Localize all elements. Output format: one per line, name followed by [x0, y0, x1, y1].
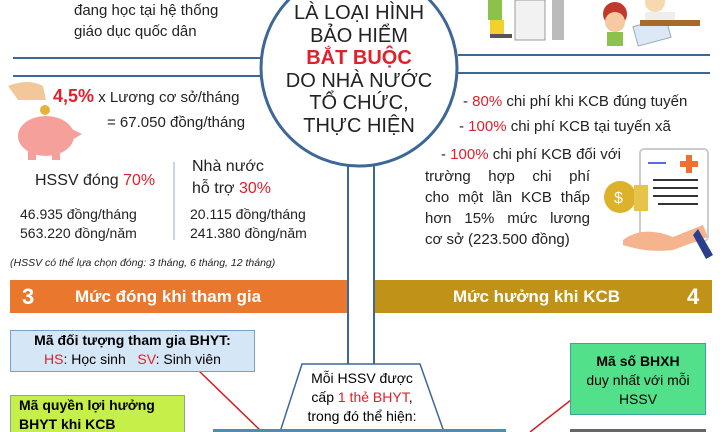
box: social insurance number: HSSV — [619, 391, 657, 407]
justified benefit text: trường hợp chi phí — [425, 168, 590, 185]
top-left text — [74, 2, 218, 40]
box: benefit code — [10, 395, 185, 432]
heading 3: 3 — [22, 284, 34, 309]
justified benefit text — [425, 168, 590, 248]
circle text: BẮT BUỘC — [306, 47, 412, 69]
justified benefit text: cơ sở (223.500 đồng) — [425, 231, 570, 248]
box: participant code: Mã đối tượng tham gia BHYT: — [34, 332, 231, 348]
text: = 67.050 đồng/tháng — [107, 114, 245, 131]
state share: hỗ trợ 30% — [192, 180, 271, 197]
box: benefit code: BHYT khi KCB — [19, 416, 115, 432]
icon: piggy bank — [8, 82, 82, 160]
icon: form with coins and hand: $ — [614, 190, 623, 207]
icon: form with coins and hand — [604, 148, 713, 259]
box: social insurance number: Mã số BHXH — [596, 353, 680, 369]
box: benefit code: Mã quyền lợi hưởng — [19, 397, 155, 413]
text: 563.220 đồng/năm — [20, 225, 137, 241]
text: - 100% chi phí KCB đối với — [441, 146, 621, 163]
heading 3: Mức đóng khi tham gia — [75, 287, 261, 306]
top-left text: đang học tại hệ thống — [74, 2, 218, 19]
box: participant code — [10, 330, 255, 372]
text: 241.380 đồng/năm — [190, 225, 307, 241]
top-left text: giáo dục quốc dân — [74, 23, 197, 40]
text: 46.935 đồng/tháng — [20, 206, 137, 222]
heading 4: 4 — [687, 284, 699, 309]
heading 3 — [10, 280, 347, 313]
formula text: 4,5% x Lương cơ sở/tháng — [53, 86, 239, 106]
text: - 100% chi phí KCB tại tuyến xã — [459, 118, 671, 135]
benefits list: - 80% chi phí khi KCB đúng tuyến — [463, 93, 687, 110]
circle text — [286, 1, 432, 136]
note: (HSSV có thể lựa chọn đóng: 3 tháng, 6 tháng, 12 tháng) — [10, 257, 275, 269]
trapezoid card callout: cấp 1 thẻ BHYT, — [311, 389, 413, 405]
circle text: BẢO HIỂM — [310, 24, 408, 46]
trapezoid card callout: Mỗi HSSV được — [311, 370, 413, 386]
circle text: THỰC HIỆN — [303, 114, 415, 136]
heading 4: Mức hưởng khi KCB — [453, 287, 620, 306]
bottom card bar — [213, 429, 506, 432]
circle text: DO NHÀ NƯỚC — [286, 70, 432, 92]
state share — [192, 158, 271, 197]
box: participant code: HS: Học sinh SV: Sinh viên — [44, 351, 221, 367]
justified benefit text: hơn 15% mức lương — [425, 210, 590, 227]
trapezoid card callout: trong đó thể hiện: — [308, 408, 416, 424]
HSSV share: HSSV đóng 70% — [35, 172, 155, 189]
box: social insurance number: duy nhất với mỗi — [586, 372, 690, 388]
trapezoid card callout — [280, 363, 444, 429]
illustration: doctor and kids — [488, 0, 700, 47]
circle text: TỔ CHỨC, — [309, 92, 409, 114]
circle text: LÀ LOẠI HÌNH — [294, 2, 424, 24]
state share: Nhà nước — [192, 158, 264, 175]
text: 20.115 đồng/tháng — [190, 206, 306, 222]
bottom right dark box — [570, 429, 706, 432]
justified benefit text: cho một lần KCB thấp — [425, 189, 590, 206]
heading 4 — [375, 280, 712, 313]
box: social insurance number — [570, 343, 706, 415]
